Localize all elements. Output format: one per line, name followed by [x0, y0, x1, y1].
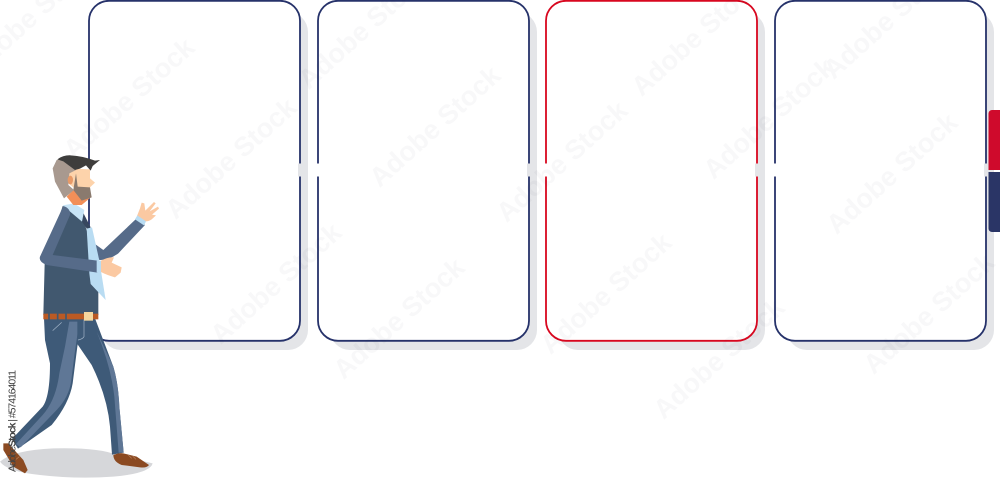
side hair: [53, 159, 76, 198]
back leg highlight: [16, 322, 79, 447]
red side tab: [988, 110, 1000, 170]
back shoe laces: [13, 453, 19, 459]
raised cuff: [135, 215, 146, 225]
tie: [87, 227, 106, 300]
belt: [43, 314, 98, 319]
front arm: [40, 206, 97, 273]
watermark text: Adobe Stock: [535, 226, 678, 360]
neck: [67, 190, 92, 205]
watermark text: Adobe Stock: [205, 216, 348, 350]
ground shadow: [0, 448, 153, 478]
watermark text: Adobe Stock: [698, 51, 841, 185]
belt loops: [49, 313, 66, 320]
raised hand: [137, 202, 159, 221]
watermark text: Adobe Stock: [858, 246, 1000, 380]
torso: [43, 206, 98, 315]
face: [68, 168, 95, 193]
back leg: [12, 318, 82, 449]
front hand: [101, 257, 122, 277]
pocket stitching: [53, 319, 84, 340]
panel 1 shadow and frame: [86, 1, 308, 350]
buckle: [84, 312, 93, 321]
raised arm: [89, 218, 145, 260]
front leg: [77, 318, 124, 455]
tie knot: [82, 212, 91, 229]
front leg highlight: [97, 332, 124, 453]
panel 4 shadow and frame: [772, 1, 994, 350]
walking businessman illustration: [0, 155, 159, 478]
front shoe: [113, 453, 149, 468]
vertical stock credit: AdobeStock | #574164011: [6, 370, 18, 472]
top hair: [57, 155, 100, 171]
watermark text: Adobe Stock: [160, 91, 303, 225]
watermark text: Adobe Stock: [648, 291, 791, 425]
watermark text: Adobe Stock: [328, 251, 471, 385]
ear: [68, 176, 73, 184]
collar: [63, 203, 84, 222]
back shoe: [3, 443, 28, 473]
panel 3 shadow and red frame: [543, 1, 765, 350]
navy side tab: [988, 172, 1000, 232]
watermark text: Adobe Stock: [821, 106, 964, 240]
watermark text: Adobe Stock: [491, 94, 634, 228]
beard: [73, 173, 92, 201]
front cuff: [97, 261, 101, 272]
watermark text: Adobe Stock: [364, 59, 507, 193]
panel 2 shadow and frame: [315, 1, 537, 350]
watermark text: Adobe Stock: [58, 31, 201, 165]
front shoe laces: [128, 455, 136, 459]
